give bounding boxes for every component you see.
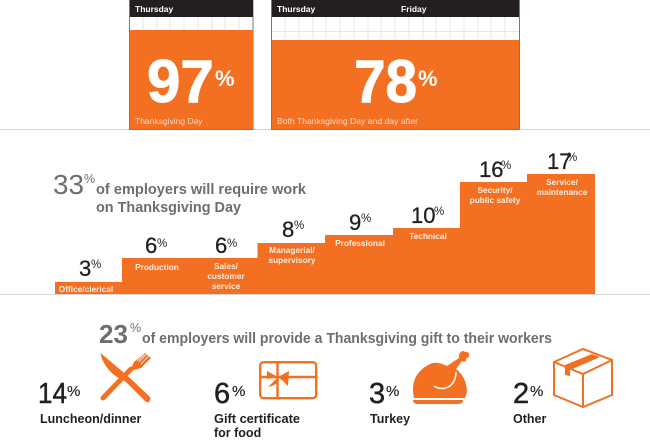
- calendar header: Thursday, Friday: [272, 0, 519, 17]
- step: Office/clerical 3%: %: [91, 259, 101, 271]
- stat: Gift certificate 6%: Gift certificate: [214, 412, 300, 426]
- heading: 23% of employers: [99, 319, 552, 349]
- icon: roast turkey: [413, 351, 469, 404]
- panel: Thursday and Friday calendar 78%: [272, 0, 520, 130]
- step: Office/clerical 3%: [59, 256, 113, 294]
- big number 78%: 78: [354, 48, 417, 115]
- stat: Turkey 3%: Turkey: [370, 412, 410, 426]
- stat: Luncheon/dinner 14%: Luncheon/dinner: [40, 412, 142, 426]
- stat: Turkey 3%: [369, 378, 410, 426]
- step: Managerial/supervisory 8%: Managerial/: [269, 245, 316, 255]
- stat: Gift certificate 6%: [214, 378, 300, 440]
- caption: Thanksgiving Day: [135, 116, 203, 126]
- big number 78%: %: [418, 66, 438, 91]
- step: Service/maintenance 17%: 17: [547, 149, 571, 174]
- orange fill: [130, 30, 253, 129]
- stat: Gift certificate 6%: %: [232, 383, 245, 400]
- step: Managerial/supervisory 8%: %: [294, 220, 304, 232]
- heading: 33% of employers: [53, 169, 307, 216]
- heading: 33% of employers: %: [84, 172, 95, 186]
- step: Sales/customer service 6%: 6: [215, 233, 227, 258]
- step chart: job categories: [55, 149, 595, 294]
- calendar header: Thursday: Thursday: [135, 4, 174, 14]
- stat: Turkey 3%: 3: [369, 378, 385, 410]
- big number 97%: 97: [147, 48, 214, 115]
- step: Production 6%: Production: [135, 262, 179, 272]
- step: Service/maintenance 17%: maintenance: [537, 187, 588, 197]
- step: Production 6%: [135, 233, 179, 272]
- heading: 33% of employers: on Thanksgiving Day: [96, 199, 242, 216]
- orange fill: [272, 40, 519, 129]
- step: Technical 10%: %: [434, 206, 444, 218]
- step: Sales/customer service 6%: service: [212, 281, 241, 291]
- stat: Other 2%: %: [530, 383, 543, 400]
- step: Sales/customer service 6%: %: [227, 238, 237, 250]
- heading: 23% of employers: of employers will provide a Thanksgiving gift to their workers: [142, 330, 552, 347]
- icon: gift card: [260, 362, 316, 399]
- calendar header: Thursday, Friday: Friday: [401, 4, 427, 14]
- stat: Luncheon/dinner 14%: 14: [38, 378, 67, 410]
- stat: Other 2%: Other: [513, 412, 546, 426]
- heading: 23% of employers: %: [130, 321, 141, 335]
- stat: Gift certificate 6%: for food: [214, 426, 261, 440]
- stat: Luncheon/dinner 14%: [38, 378, 142, 426]
- step: Production 6%: 6: [145, 233, 157, 258]
- step: Managerial/supervisory 8%: supervisory: [268, 255, 316, 265]
- steps: [55, 174, 595, 294]
- heading: 33% of employers: 33: [53, 169, 84, 200]
- step: Security/public safety 16%: public safety: [470, 195, 521, 205]
- caption: Both Thanksgiving Day and day after: [277, 116, 418, 126]
- step: Service/maintenance 17%: [537, 149, 588, 197]
- step: Professional 9%: [335, 210, 385, 248]
- step: Sales/customer service 6%: Sales/: [214, 261, 239, 271]
- step: Office/clerical 3%: Office/clerical: [59, 284, 113, 294]
- stat: Gift certificate 6%: 6: [214, 378, 230, 410]
- heading: 33% of employers: of employers will require work: [96, 181, 307, 198]
- step: Security/public safety 16%: 16: [479, 157, 503, 182]
- icon: knife and fork: [100, 353, 151, 402]
- stat: Other 2%: [513, 378, 546, 426]
- step: Professional 9%: 9: [349, 210, 361, 235]
- heading: 23% of employers: 23: [99, 319, 128, 349]
- step: Technical 10%: [409, 203, 447, 241]
- step: Professional 9%: %: [361, 213, 371, 225]
- step: Service/maintenance 17%: Service/: [546, 177, 579, 187]
- step: Production 6%: %: [157, 238, 167, 250]
- calendar header: Thursday, Friday: Thursday: [277, 4, 316, 14]
- icon: cardboard box: [554, 349, 612, 407]
- step: Technical 10%: 10: [411, 203, 435, 228]
- big number 97%: %: [215, 66, 235, 91]
- step: Office/clerical 3%: 3: [79, 256, 91, 281]
- step: Service/maintenance 17%: %: [567, 152, 577, 164]
- stat: Turkey 3%: %: [386, 383, 399, 400]
- step: Managerial/supervisory 8%: 8: [282, 217, 294, 242]
- stat: Other 2%: 2: [513, 378, 529, 410]
- step: Security/public safety 16%: Security/: [477, 185, 513, 195]
- stat: Luncheon/dinner 14%: %: [67, 383, 80, 400]
- step: Sales/customer service 6%: customer: [207, 271, 245, 281]
- step: Professional 9%: Professional: [335, 238, 385, 248]
- step: Technical 10%: Technical: [409, 231, 447, 241]
- step: Security/public safety 16%: %: [501, 160, 511, 172]
- step: Managerial/supervisory 8%: [268, 217, 316, 265]
- step: Security/public safety 16%: [470, 157, 521, 205]
- panel: Thursday calendar 97%: [130, 0, 253, 130]
- step: Sales/customer service 6%: [207, 233, 245, 291]
